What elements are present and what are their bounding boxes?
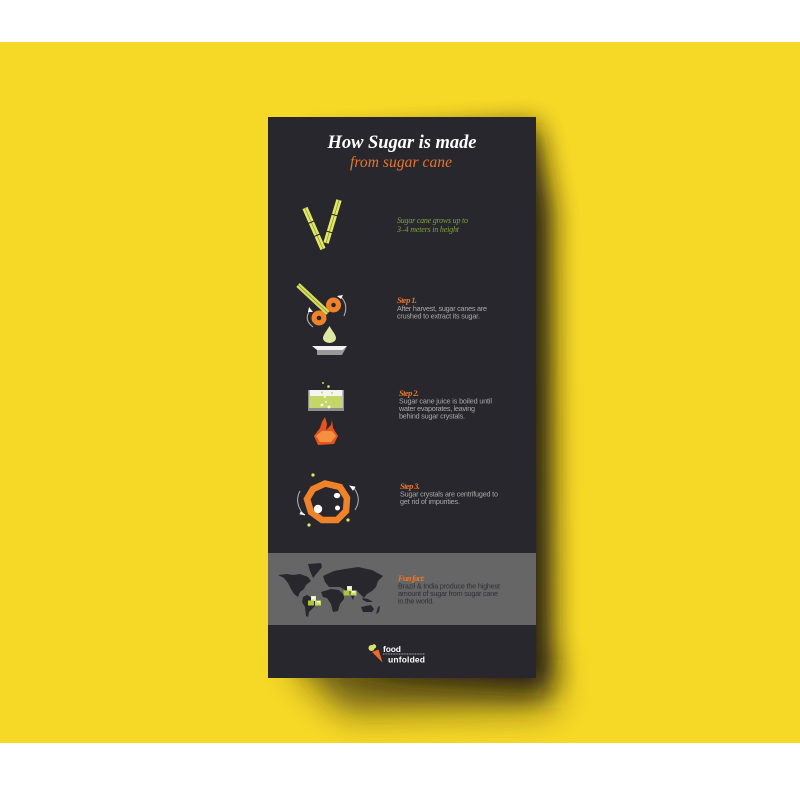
step 1 text: After harvest, sugar canes are [397,304,487,313]
icon: flame [314,417,338,445]
text: cane height: Sugar cane grows up to [397,216,468,225]
text: cane height [396,216,468,234]
fun fact text: Fun fact: [397,573,425,583]
icon: tray [312,346,347,350]
icon: Brazil sugar cubes [308,596,321,606]
step 2 text: behind sugar crystals. [399,412,465,420]
panel: dark card [268,117,536,678]
step 3 text [400,481,498,506]
title: from sugar cane [350,154,452,171]
icon: sugar canes [305,200,339,249]
icon: world map [278,563,383,617]
logo: food unfolded: unfolded [388,654,425,664]
step 2 text: water evaporates, leaving [398,404,475,413]
icon: crushing rollers [298,285,347,355]
step 3 text: get rid of impurities. [400,497,460,506]
step 1 text [397,295,487,320]
title [326,133,476,171]
title: How Sugar is made [326,133,476,153]
card shadow [288,125,556,712]
panel: fun fact band [268,553,536,625]
icon: boiling beaker [308,382,344,411]
step 3 text: Step 3. [400,481,420,491]
icon: centrifuge [298,473,358,527]
step 2 text: Sugar cane juice is boiled until [399,396,492,406]
fun fact text: amount of sugar from sugar cane [398,589,498,598]
fun fact text: in the world. [398,596,434,606]
step 2 text [398,388,492,420]
step 1 text: Step 1. [397,295,417,305]
fun fact text [397,573,500,606]
icon: juice drop [323,326,336,343]
text: cane height: 3–4 meters in height [396,225,460,234]
fun fact text: Brazil & India produce the highest [398,582,500,590]
logo: food unfolded: food [383,644,401,654]
step 1 text: crushed to extract its sugar. [397,312,480,320]
icon: India sugar cubes [344,586,356,596]
step 3 text: Sugar crystals are centrifuged to [400,490,498,498]
logo: food unfolded [368,644,425,664]
step 2 text: Step 2. [399,388,419,398]
